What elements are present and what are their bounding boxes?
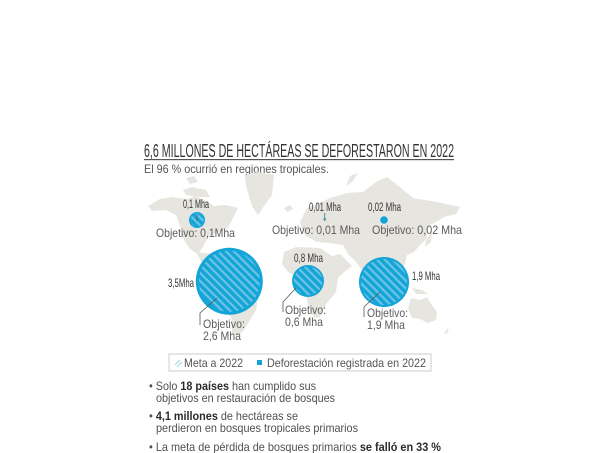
- circle: 0,01 Mha Europa: Objetivo: 0,01 Mha: [272, 223, 360, 237]
- circle: 1,9 Mha Asia-Pacífico: Objetivo:: [367, 306, 408, 320]
- world map: [148, 172, 460, 336]
- circle: 0,8 Mha África: Objetivo:: [285, 303, 326, 317]
- bullet: 4,1 millones: • 4,1 millones de hectáreas se: [149, 409, 298, 423]
- circle: 0,8 Mha África: 0,6 Mha: [285, 315, 323, 329]
- circle: 3,5 Mha Latinoamérica: 2,6 Mha: [203, 329, 241, 343]
- subtitle: El 96 % ocurrió en regiones tropicales.: [144, 162, 329, 176]
- circle: 3,5 Mha Latinoamérica: 3,5Mha: [168, 276, 194, 290]
- circle: 1,9 Mha Asia-Pacífico: [359, 257, 440, 332]
- circle: 1,9 Mha Asia-Pacífico: 1,9 Mha: [412, 269, 440, 283]
- circle: 0,8 Mha África: 0,8 Mha: [294, 251, 323, 265]
- circle: 0,8 Mha África: [283, 251, 326, 329]
- legend: Meta a 2022: [184, 356, 243, 370]
- circle: 0,02 Mha Asia: Objetivo: 0,02 Mha: [372, 223, 462, 237]
- bullet: 18 países: • Solo 18 países han cumplido sus: [149, 379, 316, 393]
- legend: Deforestación registrada en 2022: [267, 356, 426, 370]
- circle: 1,9 Mha Asia-Pacífico: 1,9 Mha: [367, 318, 405, 332]
- bullet list: [149, 379, 441, 453]
- circle: 0,02 Mha Asia: 0,02 Mha: [368, 202, 401, 214]
- legend: [169, 354, 431, 371]
- circle: 0,01 Mha Europa: 0,01 Mha: [309, 202, 341, 214]
- bullet: 18 países, second line: objetivos en restauración de bosques: [156, 391, 335, 405]
- circle: 0,02 Mha Asia: [368, 202, 462, 237]
- circle: 0,1 Mha Norteamérica: [156, 199, 235, 240]
- circle: 0,1 Mha Norteamérica: Objetivo: 0,1Mha: [156, 226, 235, 240]
- circle: 0,01 Mha Europa: [272, 202, 360, 237]
- circle: 0,1 Mha Norteamérica: 0,1 Mha: [183, 199, 209, 211]
- circle: 3,5 Mha Latinoamérica: Objetivo:: [203, 317, 245, 331]
- bullet: 4,1 millones, second line: perdieron en bosques tropicales primarios: [156, 421, 358, 435]
- circle: 3,5 Mha Latinoamérica: [168, 248, 263, 343]
